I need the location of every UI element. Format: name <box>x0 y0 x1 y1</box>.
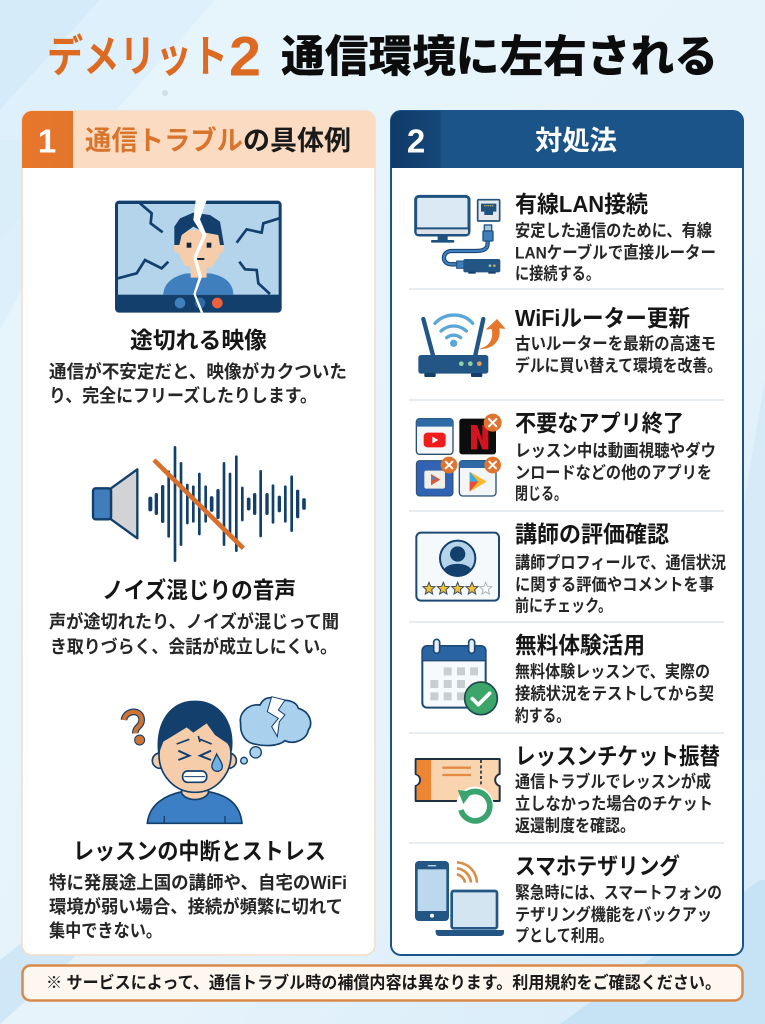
panel header: solutions: 2 <box>407 122 425 160</box>
callout: footer note: ※ サービスによって、通信トラブル時の補償内容は異なります。利用規約をご確認ください。 <box>46 972 721 992</box>
icon: stressed student <box>124 697 311 823</box>
panel header: examples <box>22 111 375 168</box>
text block: noisy audio <box>49 577 339 657</box>
panel header: examples: 1 <box>38 122 56 160</box>
text block: tethering <box>515 853 722 946</box>
panel: solutions <box>391 111 743 955</box>
text block: free trial: 約する。 <box>515 706 570 726</box>
text block: lesson interruption <box>49 838 347 941</box>
text block: broken video: 通信が不安定だと、映像がカクついた <box>49 361 347 382</box>
icon: refund ticket <box>416 759 500 824</box>
text block: free trial <box>515 632 714 726</box>
text block: closing apps: ンロードなどの他のアプリを <box>515 464 712 482</box>
title: デメリット <box>47 32 228 82</box>
text block: teacher rating <box>515 521 726 616</box>
text block: ticket refund <box>515 743 720 836</box>
icon: WiFi router <box>418 315 506 377</box>
text block: closing apps: レッスン中は動画視聴やダウ <box>515 440 716 460</box>
text block: closing apps: 不要なアプリ終了 <box>515 410 684 436</box>
text block: broken video: 途切れる映像 <box>130 327 267 353</box>
text block: ticket refund: 返還制度を確認。 <box>515 816 635 836</box>
text block: ticket refund: 通信トラブルでレッスンが成 <box>515 772 711 792</box>
icon: noisy speaker <box>93 447 304 561</box>
text block: tethering: 緊急時には、スマートフォンの <box>515 882 722 902</box>
text block: teacher rating: に関する評価やコメントを事 <box>515 576 714 594</box>
text block: ticket refund: レッスンチケット振替 <box>515 743 720 769</box>
text block: wired LAN: 安定した通信のために、有線 <box>515 222 712 240</box>
text block: teacher rating: 講師プロフィールで、通信状況 <box>515 554 726 572</box>
icon: broken video call <box>115 200 282 313</box>
panel header: solutions <box>391 111 743 168</box>
text block: ticket refund: 立しなかった場合のチケット <box>515 794 713 814</box>
text block: lesson interruption: 環境が弱い場合、接続が頻繁に切れて <box>49 896 343 917</box>
panel header: solutions: 対処法 <box>535 126 617 156</box>
text block: wired LAN: LANケーブルで直接ルーター <box>515 242 716 262</box>
text block: tethering: テザリング機能をバックアッ <box>515 904 712 924</box>
text block: WiFi router: 古いルーターを最新の高速モ <box>515 334 716 354</box>
text block: WiFi router: WiFiルーター更新 <box>515 305 690 331</box>
text block: wired LAN: に接続する。 <box>515 264 600 284</box>
text block: lesson interruption: レッスンの中断とストレス <box>73 838 326 864</box>
text block: tethering: プとして利用。 <box>515 926 613 946</box>
text block: WiFi router: デルに買い替えて環境を改善。 <box>515 356 722 376</box>
title <box>47 24 718 88</box>
callout: footer note <box>22 966 742 1000</box>
text block: noisy audio: ノイズ混じりの音声 <box>102 577 296 603</box>
title: 通信環境に左右される <box>281 32 718 82</box>
panel: concrete examples of trouble <box>22 111 375 955</box>
title: 2 <box>229 24 261 88</box>
icon: wired LAN <box>416 196 500 274</box>
text block: wired LAN <box>515 191 716 284</box>
text block: broken video <box>49 327 347 406</box>
text block: closing apps <box>515 410 716 504</box>
text block: tethering: スマホテザリング <box>515 853 680 879</box>
text block: free trial: 接続状況をテストしてから契 <box>515 684 714 704</box>
text block: free trial: 無料体験レッスンで、実際の <box>515 662 710 682</box>
text block: noisy audio: 声が途切れたり、ノイズが混じって聞 <box>49 611 339 632</box>
text block: free trial: 無料体験活用 <box>515 632 645 658</box>
text block: WiFi router <box>515 305 722 376</box>
text block: wired LAN: 有線LAN接続 <box>515 191 648 217</box>
icon: teacher rating <box>416 533 499 601</box>
icon: smartphone tethering <box>415 861 504 936</box>
icon: calendar check <box>422 639 497 715</box>
icon: closing apps <box>416 414 502 496</box>
text block: teacher rating: 講師の評価確認 <box>515 521 669 547</box>
panel header: examples: 通信トラブル <box>85 125 243 156</box>
text block: noisy audio: き取りづらく、会話が成立しにくい。 <box>50 636 337 657</box>
text block: teacher rating: 前にチェック。 <box>515 596 612 616</box>
text block: lesson interruption: 特に発展途上国の講師や、自宅のWiFi <box>49 873 347 893</box>
text block: closing apps: 閉じる。 <box>515 484 567 504</box>
text block: lesson interruption: 集中できない。 <box>49 921 162 941</box>
panel header: examples: の具体例 <box>243 126 351 156</box>
text block: broken video: り、完全にフリーズしたりします。 <box>49 385 317 406</box>
